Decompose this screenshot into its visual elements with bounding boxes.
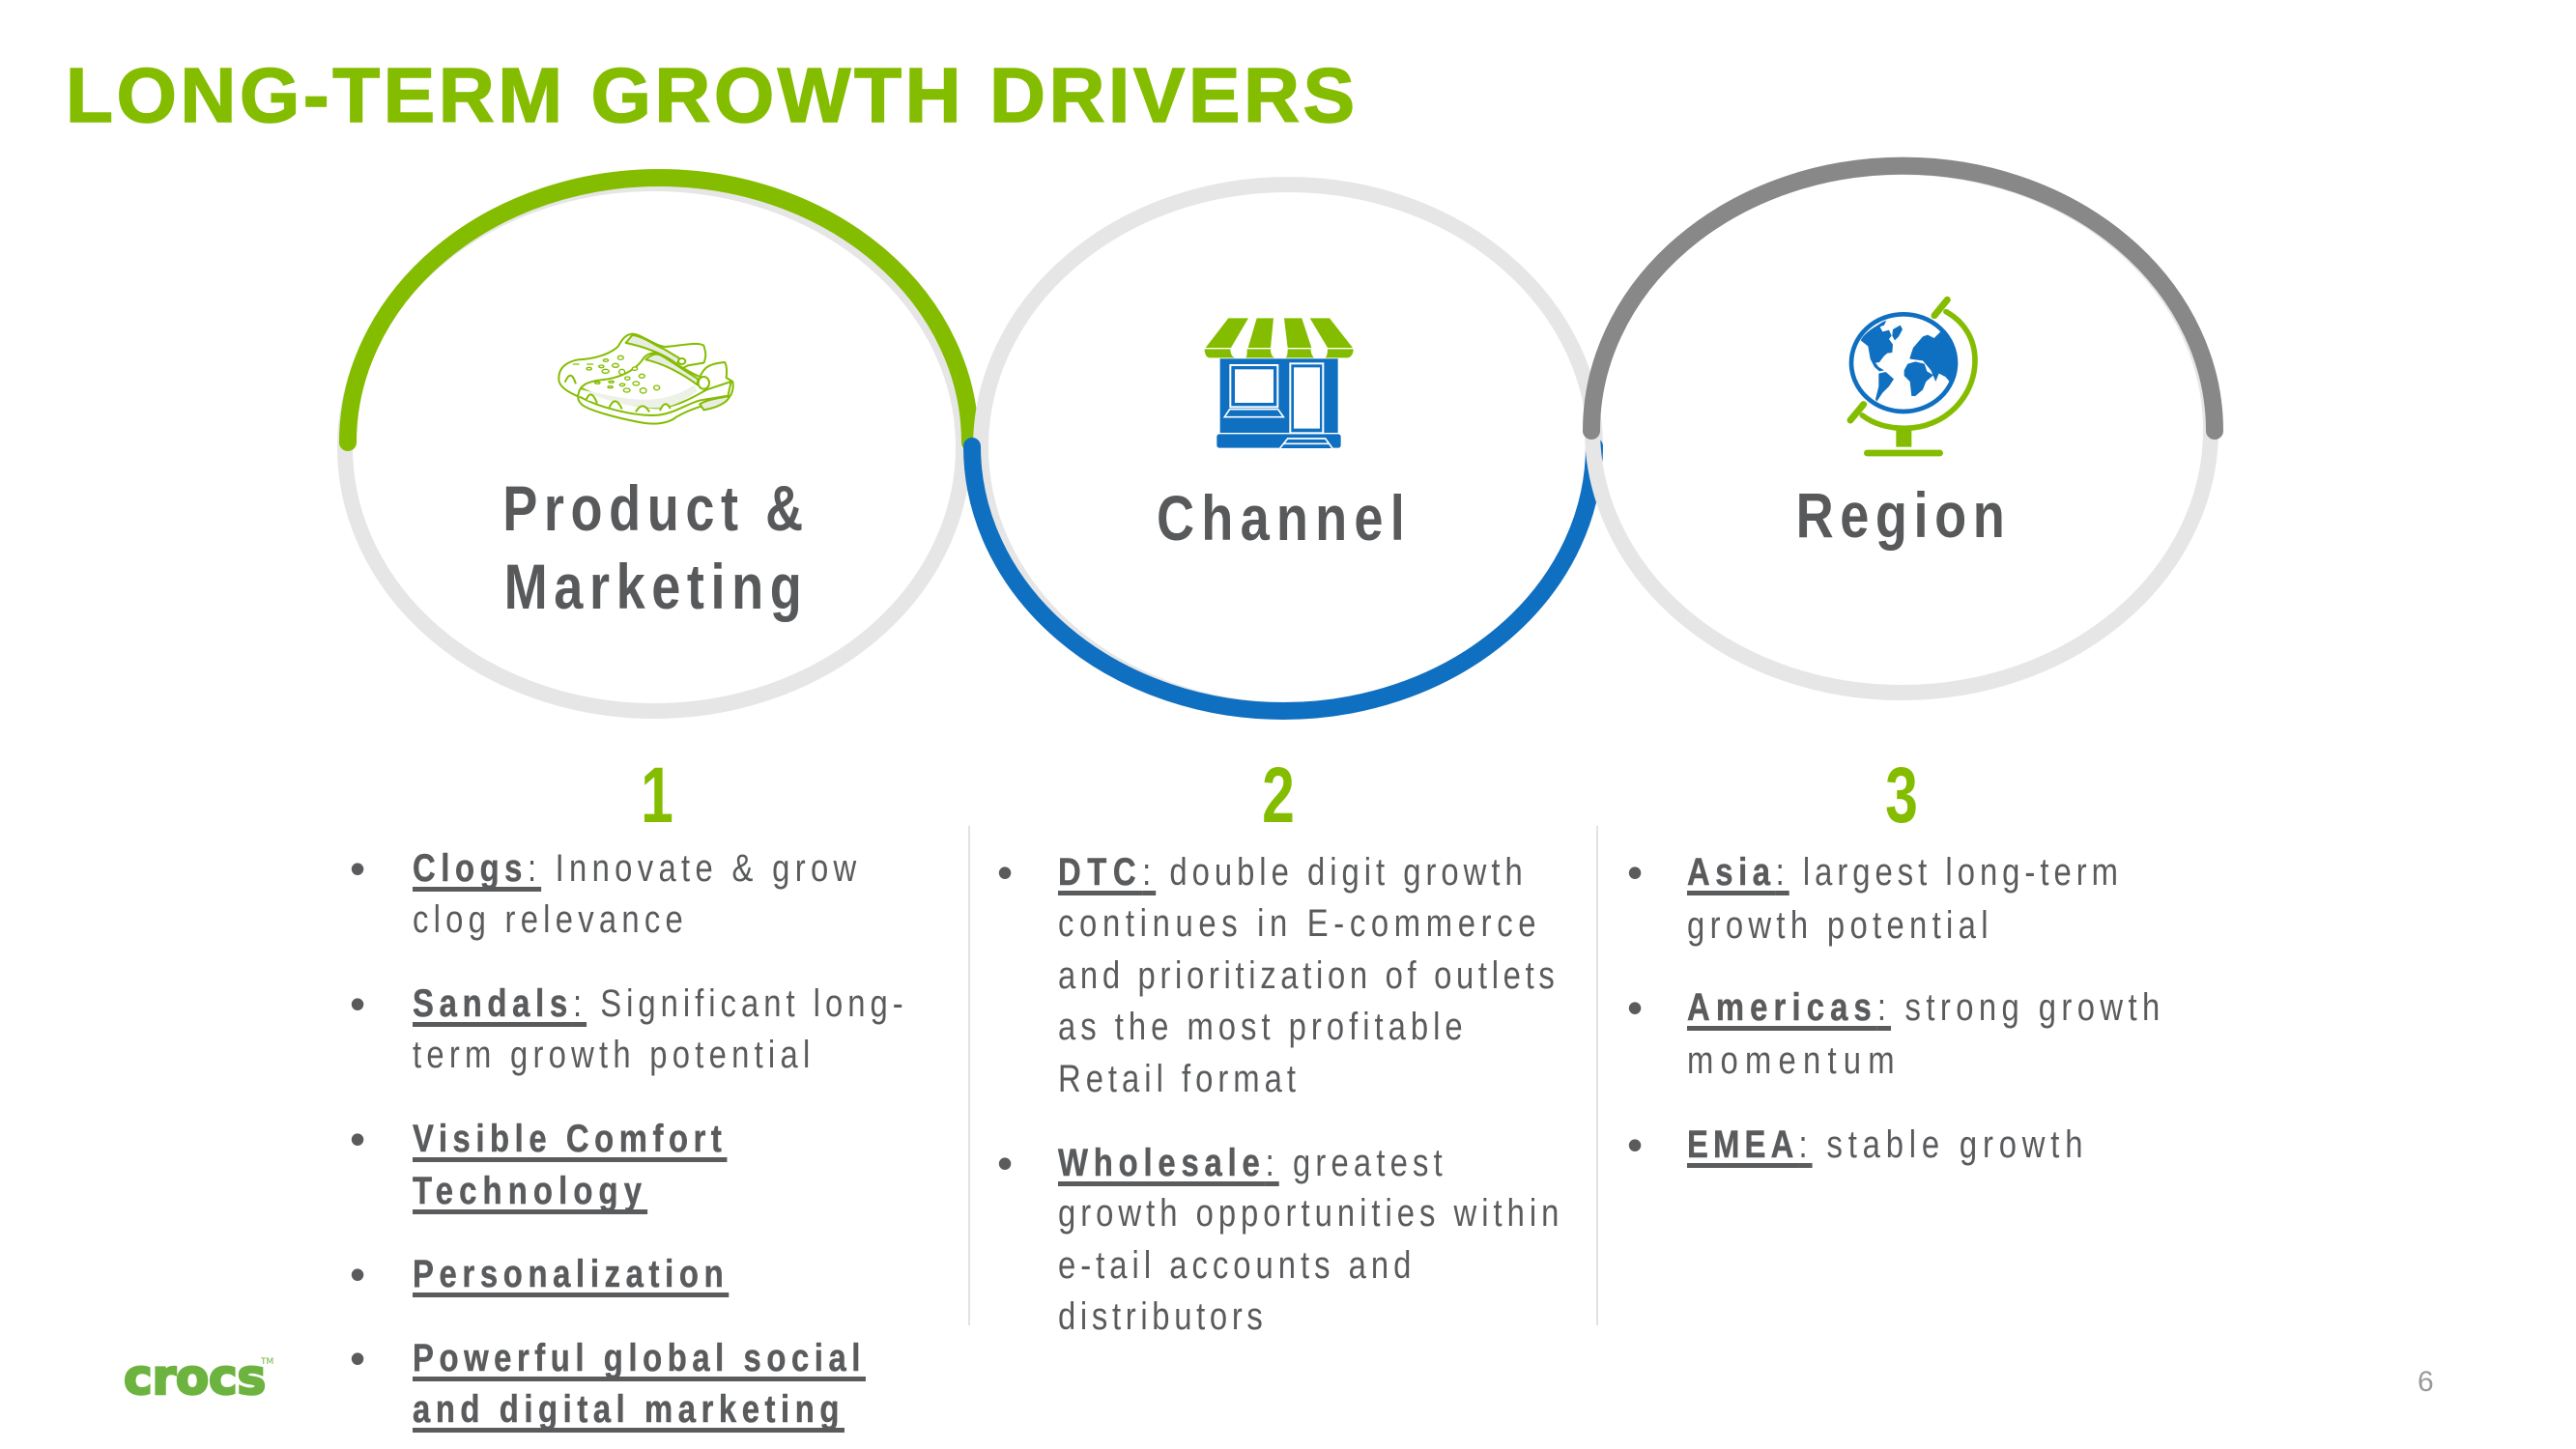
column 3 bullet list: momentum	[1687, 1039, 1902, 1082]
heading: channel: Channel	[1157, 482, 1412, 554]
column 3 bullet list	[1627, 847, 2165, 1170]
divider	[968, 826, 970, 1325]
column 1 bullet list: •	[350, 1249, 365, 1299]
heading: product and marketing: Marketing	[504, 551, 808, 622]
crocs logo: TM	[261, 1357, 273, 1367]
column 3 bullet list: growth potential	[1687, 904, 1993, 947]
heading: product and marketing	[502, 472, 810, 622]
column 3 bullet list: •	[1627, 982, 1643, 1033]
heading: product and marketing: Product &	[502, 472, 810, 544]
ring: product and marketing	[345, 178, 970, 711]
column 2 bullet list: e-tail accounts and	[1058, 1244, 1416, 1287]
column 2 bullet list: distributors	[1058, 1295, 1268, 1338]
column 3 bullet list: Asia: largest long-term	[1687, 851, 2123, 894]
ring: region	[1591, 166, 2215, 693]
column 2 bullet list: •	[997, 847, 1013, 897]
icon: storefront	[1205, 318, 1354, 448]
column 1 bullet list: •	[350, 1114, 365, 1164]
page number: 6	[2418, 1366, 2434, 1398]
icon: globe	[1850, 299, 1975, 456]
column 2 bullet list	[997, 847, 1563, 1338]
column 2 bullet list: Retail format	[1058, 1058, 1301, 1100]
column 3 bullet list: •	[1627, 847, 1643, 897]
column 1 bullet list: and digital marketing	[413, 1388, 844, 1431]
column 2 bullet list: growth opportunities within	[1058, 1192, 1563, 1235]
title: LONG-TERM GROWTH DRIVERS	[66, 52, 1359, 138]
number 3: 3	[1885, 752, 1918, 839]
column 2 bullet list: Wholesale: greatest	[1058, 1142, 1447, 1184]
heading: region: Region	[1796, 479, 2011, 551]
column 1 bullet list: clog relevance	[413, 898, 688, 941]
column 1 bullet list: •	[350, 843, 365, 894]
number 1: 1	[641, 752, 673, 839]
divider	[1596, 826, 1598, 1325]
column 2 bullet list: •	[997, 1138, 1013, 1188]
number 2: 2	[1262, 752, 1295, 839]
column 3 bullet list: Americas: strong growth	[1687, 986, 2165, 1029]
column 3 bullet list: EMEA: stable growth	[1687, 1123, 2088, 1166]
column 1 bullet list: Clogs: Innovate & grow	[413, 847, 862, 890]
column 1 bullet list: Powerful global social	[413, 1337, 866, 1379]
column 1 bullet list: •	[350, 979, 365, 1029]
column 1 bullet list: Visible Comfort	[413, 1118, 727, 1160]
icon: clogs	[558, 334, 733, 424]
column 1 bullet list: Technology	[413, 1170, 647, 1212]
column 1 bullet list	[350, 843, 908, 1433]
column 2 bullet list: as the most profitable	[1058, 1006, 1468, 1048]
column 2 bullet list: and prioritization of outlets	[1058, 954, 1559, 997]
column 3 bullet list: •	[1627, 1120, 1643, 1170]
ring: channel	[972, 185, 1595, 711]
column 1 bullet list: Personalization	[413, 1253, 729, 1295]
column 1 bullet list: term growth potential	[413, 1034, 815, 1076]
column 2 bullet list: continues in E-commerce	[1058, 902, 1541, 945]
crocs logo: crocs	[124, 1350, 266, 1406]
column 2 bullet list: DTC: double digit growth	[1058, 851, 1528, 894]
column 1 bullet list: •	[350, 1333, 365, 1383]
diagram: three overlapping rings	[337, 156, 2223, 720]
column 1 bullet list: Sandals: Significant long-	[413, 982, 908, 1025]
